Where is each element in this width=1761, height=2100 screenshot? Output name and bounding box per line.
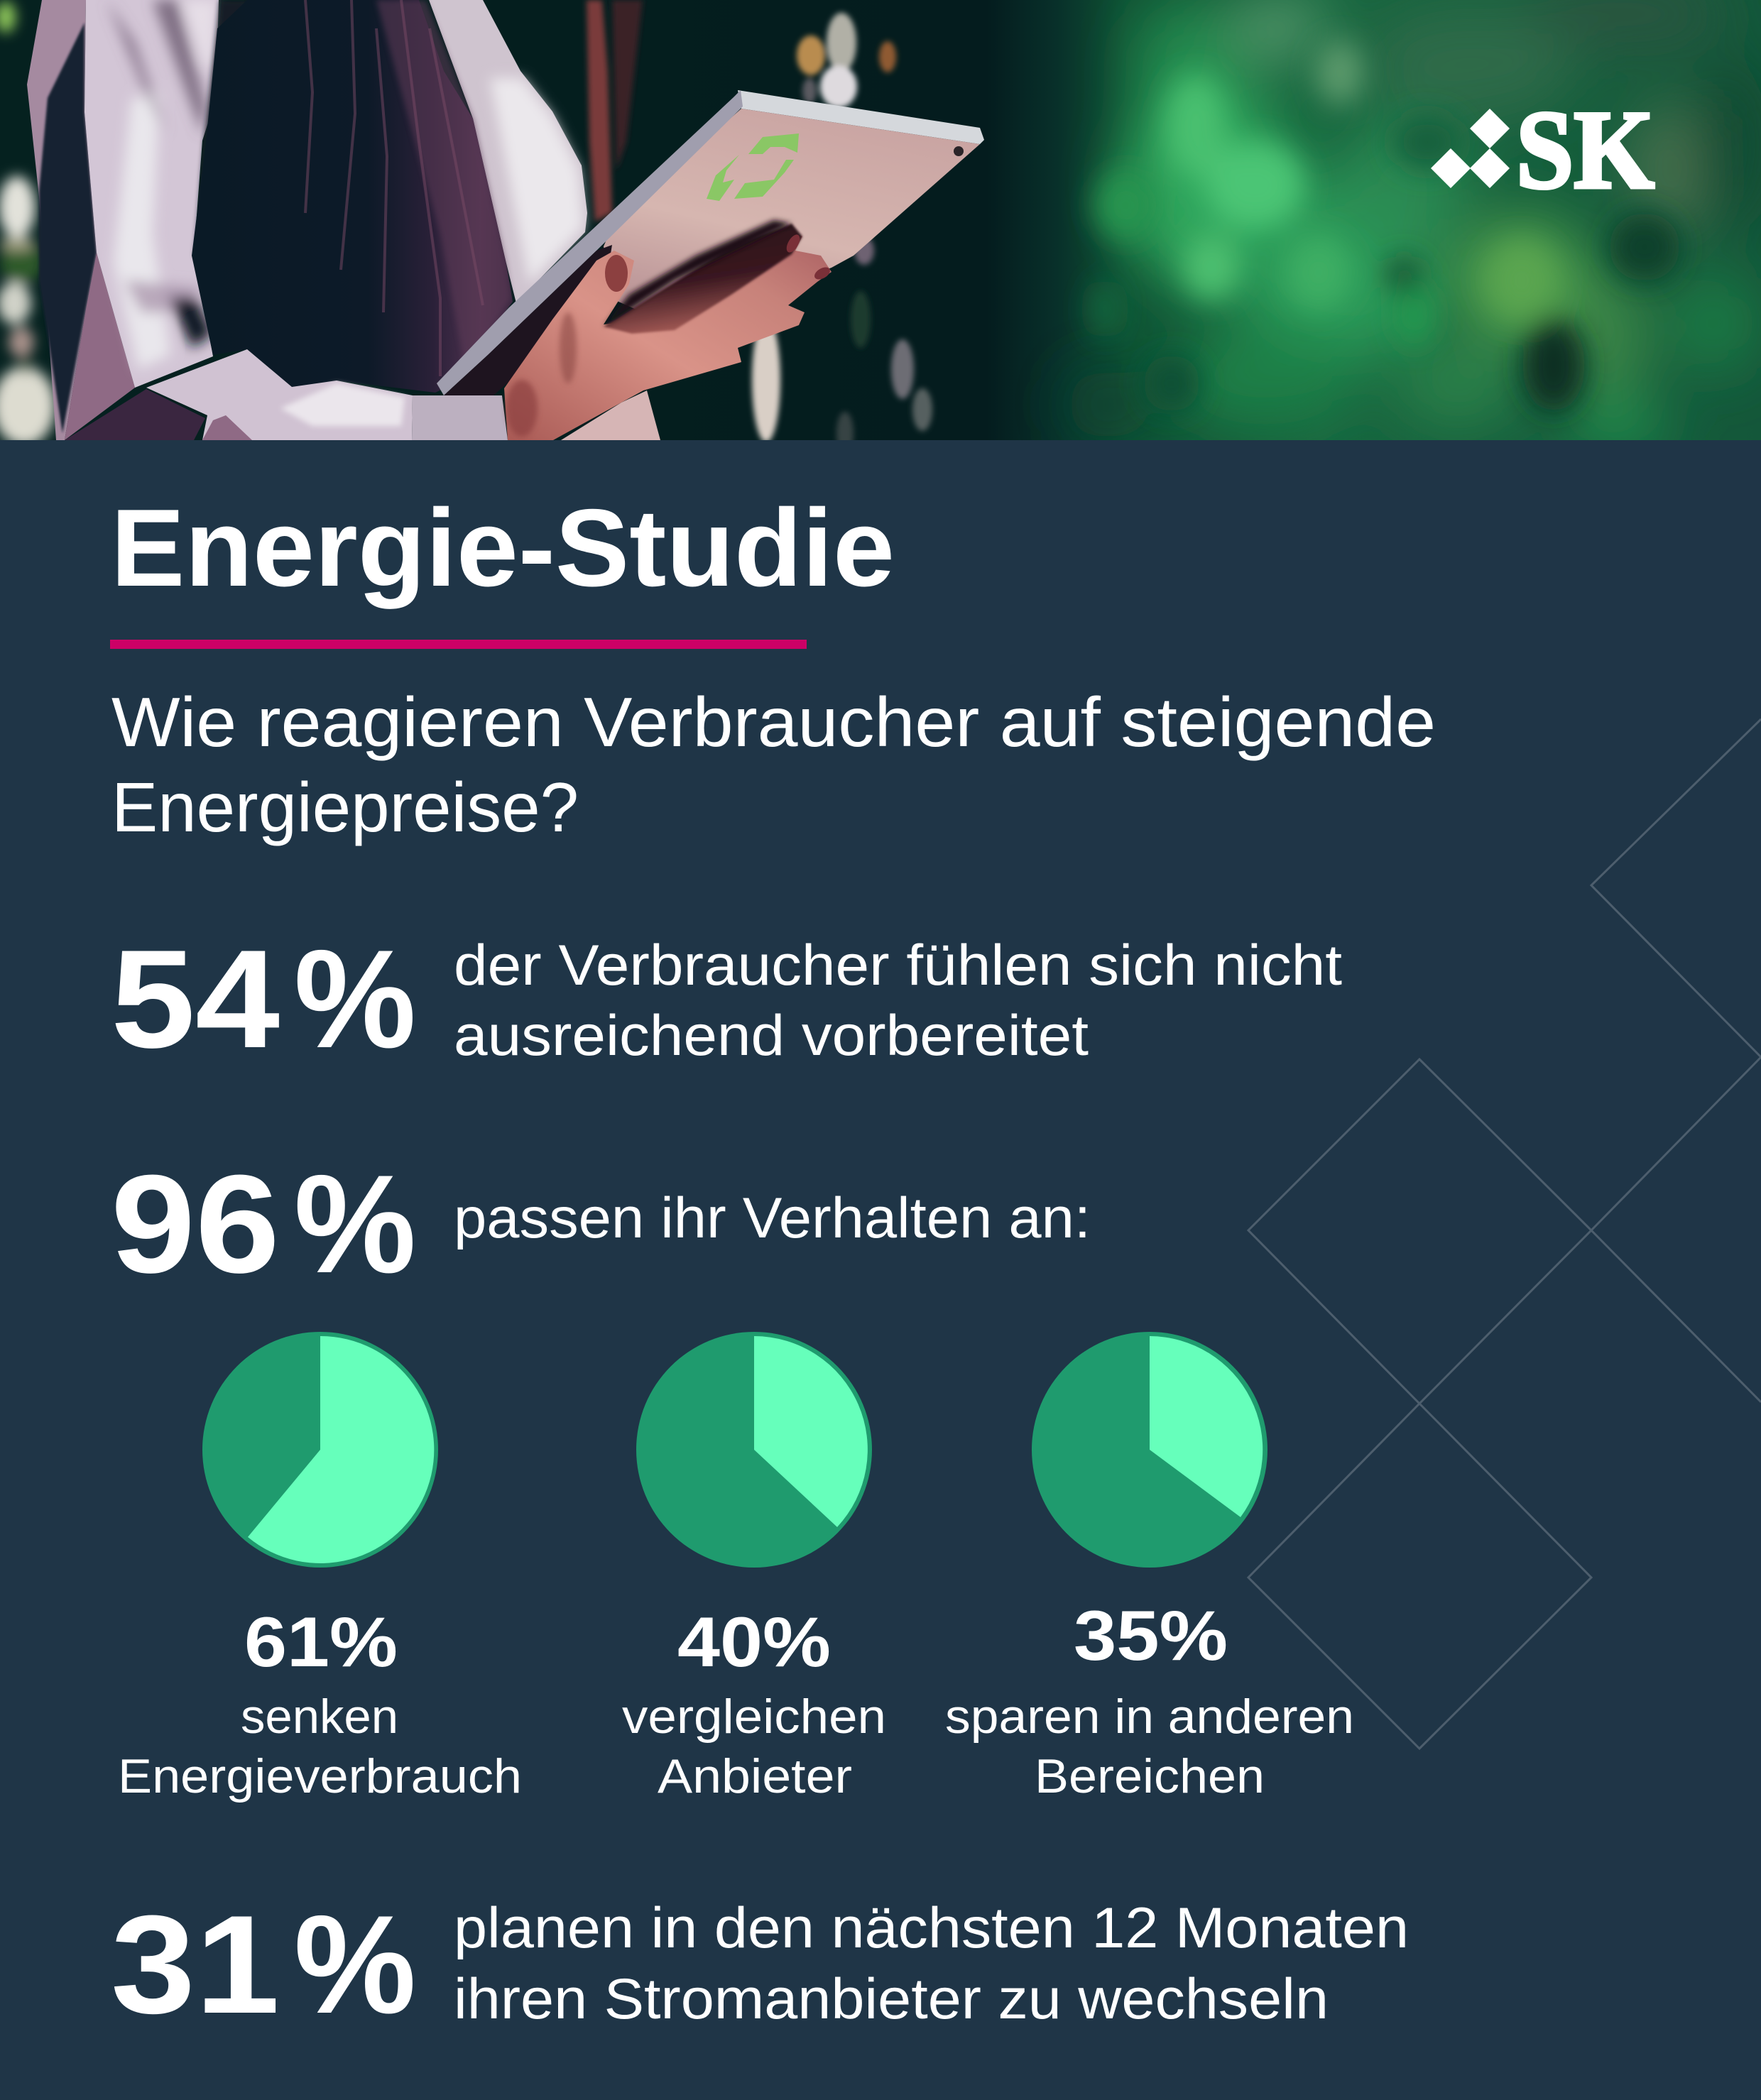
stat: 31%: % (294, 1886, 416, 2042)
logo wordmark: SK (1516, 88, 1654, 212)
label: 40% vergleichen Anbieter (622, 1602, 886, 1803)
label: 61% senken Energieverbrauch (118, 1602, 522, 1803)
text: 54% description: ausreichend vorbereitet (454, 1004, 1089, 1068)
text: 31% description (454, 1896, 1409, 2031)
logo: SK with three diamonds (1431, 88, 1654, 212)
text: 54% description: der Verbraucher fühlen sich nicht (454, 934, 1342, 997)
logo diamonds (1431, 109, 1510, 188)
recycling symbol on tablet (707, 133, 799, 201)
right shirt panel (429, 0, 587, 303)
shirt collar and cuff (65, 349, 508, 440)
subtitle: Wie reagieren Verbraucher auf steigende (111, 683, 1436, 761)
left edge bokeh (0, 1, 55, 446)
text: 31% description: planen in den nächsten 12 Monaten (454, 1896, 1409, 1960)
header photo: woman holding tablet against green bokeh (0, 0, 1761, 454)
label: 35% sparen in anderen Bereichen: sparen in anderen (945, 1690, 1354, 1744)
title: Energie-Studie (111, 486, 895, 609)
stat: 54%: 54 (111, 921, 280, 1077)
label: 40% vergleichen Anbieter: 40% (677, 1602, 831, 1681)
shirt sleeve (27, 0, 247, 440)
text: 54% description (454, 934, 1342, 1068)
label: 61% senken Energieverbrauch: senken (241, 1690, 398, 1744)
tablet (437, 90, 984, 395)
stat: 96%: % (294, 1146, 416, 1302)
label: 35% sparen in anderen Bereichen: Bereichen (1035, 1749, 1265, 1803)
text: 31% description: ihren Stromanbieter zu wechseln (454, 1967, 1329, 2031)
pie chart: 40% (636, 1332, 872, 1568)
stat: 54%: % (294, 921, 416, 1077)
subtitle (111, 683, 1436, 846)
subtitle: Energiepreise? (111, 768, 579, 846)
white sleeve behind hand (561, 390, 660, 440)
stat: 54% (111, 921, 416, 1077)
pie chart: 61% (202, 1332, 438, 1568)
label: 40% vergleichen Anbieter: vergleichen (622, 1690, 886, 1744)
background bokeh dots behind tablet (752, 13, 932, 454)
red background stripe (587, 0, 643, 222)
label: 35% sparen in anderen Bereichen (945, 1596, 1354, 1803)
label: 40% vergleichen Anbieter: Anbieter (658, 1749, 852, 1803)
label: 61% senken Energieverbrauch: 61% (244, 1602, 398, 1681)
title underline (110, 640, 807, 649)
green bokeh background (1065, 0, 1761, 454)
pie chart: 35% (1032, 1332, 1267, 1568)
hair (192, 0, 513, 393)
stat: 31% (111, 1886, 416, 2042)
stat: 96%: 96 (111, 1146, 280, 1302)
stat: 31%: 31 (111, 1886, 280, 2042)
label: 35% sparen in anderen Bereichen: 35% (1074, 1596, 1228, 1675)
text: 96% description: passen ihr Verhalten an: (454, 1186, 1091, 1250)
hand (504, 220, 832, 440)
label: 61% senken Energieverbrauch: Energieverbrauch (118, 1749, 522, 1803)
stat: 96% (111, 1146, 416, 1302)
background diamond outlines (1248, 719, 1761, 1749)
